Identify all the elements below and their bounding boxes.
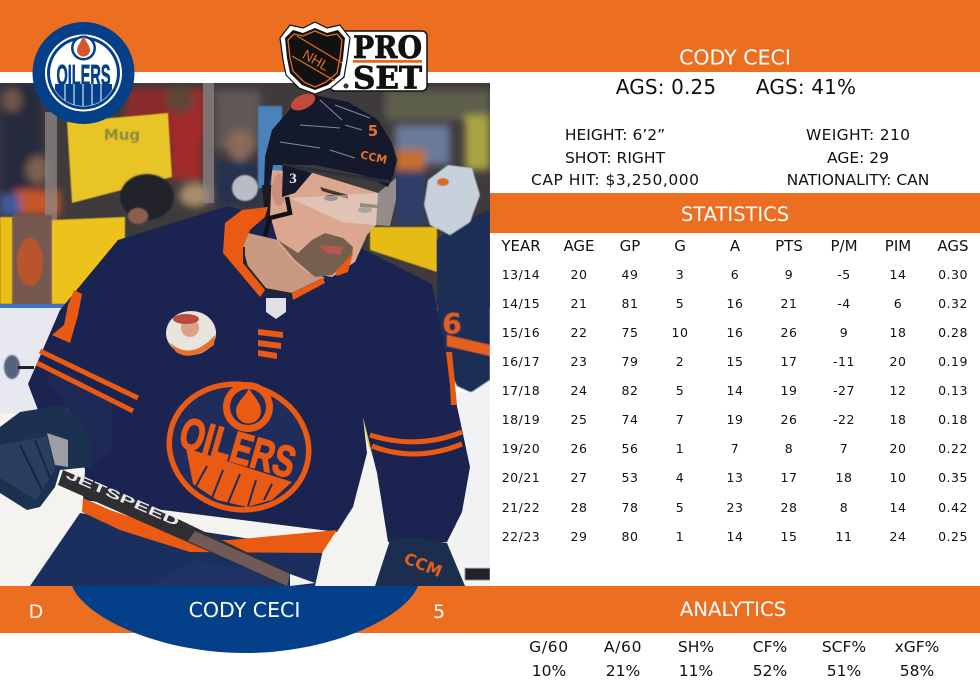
table rows: 6 (894, 296, 902, 311)
table rows (502, 267, 968, 544)
table rows: 79 (622, 354, 638, 369)
table rows: 17/18 (502, 383, 540, 398)
player name heading: CODY CECI (679, 46, 791, 70)
yellow fan signs: Mug (104, 126, 140, 144)
table rows: 8 (785, 441, 793, 456)
table rows: 78 (622, 500, 638, 515)
table rows: 9 (840, 325, 848, 340)
jersey hem stripe (82, 498, 337, 553)
right glove (375, 537, 465, 586)
analytics table: xGF% (895, 638, 939, 656)
table rows: 21 (571, 296, 587, 311)
table rows: 14 (890, 267, 906, 282)
left sleeve number (52, 290, 82, 343)
table rows: 20 (890, 354, 906, 369)
visor (290, 178, 396, 226)
table rows: 2 (676, 354, 684, 369)
table rows: 13/14 (502, 267, 540, 282)
player bio left: SHOT: RIGHT (565, 149, 666, 167)
player photo (0, 83, 490, 586)
table rows: 6 (731, 267, 739, 282)
table rows: 80 (622, 529, 638, 544)
analytics table: 11% (679, 662, 713, 680)
table rows: 27 (571, 470, 587, 485)
analytics table: 51% (827, 662, 861, 680)
table rows: 14 (727, 383, 743, 398)
right sleeve number (446, 352, 457, 405)
jersey (28, 206, 470, 542)
table header: AGS (937, 237, 969, 255)
table header: A (730, 237, 741, 255)
table rows: 22/23 (502, 529, 540, 544)
table rows: 0.19 (938, 354, 968, 369)
analytics table: G/60 (529, 638, 569, 656)
table rows: 18 (890, 412, 906, 427)
table rows: 12 (890, 383, 906, 398)
table rows: 0.30 (938, 267, 968, 282)
table header: AGE (563, 237, 595, 255)
hair behind ear (262, 185, 272, 220)
table rows: 15 (781, 529, 797, 544)
helmet brand text: CCM (359, 148, 388, 167)
player bio left: CAP HIT: $3,250,000 (531, 171, 699, 189)
table rows: 28 (781, 500, 797, 515)
player name plate: CODY CECI (189, 598, 300, 622)
helmet side plate (282, 165, 312, 197)
right glove: CCM (401, 549, 445, 581)
analytics table: SH% (678, 638, 714, 656)
table rows: 17 (781, 470, 797, 485)
table rows: -4 (837, 296, 851, 311)
table rows: 22 (571, 325, 587, 340)
table rows: 0.28 (938, 325, 968, 340)
statistics heading: STATISTICS (681, 203, 789, 226)
table rows: 0.13 (938, 383, 968, 398)
analytics heading: ANALYTICS (680, 598, 786, 621)
jersey number: 5 (433, 601, 445, 623)
player bio right: NATIONALITY: CAN (787, 171, 929, 189)
player bio right: WEIGHT: 210 (806, 126, 910, 144)
table rows: 8 (840, 500, 848, 515)
table rows: 19 (781, 383, 797, 398)
headline metrics: AGS: 0.25 (616, 75, 716, 99)
table rows: 14 (890, 500, 906, 515)
table rows: 28 (571, 500, 587, 515)
table rows: 25 (571, 412, 587, 427)
table header: G (674, 237, 686, 255)
table rows: 13 (727, 470, 743, 485)
table rows: 82 (622, 383, 638, 398)
table rows: 16/17 (502, 354, 540, 369)
face (270, 170, 378, 277)
table rows: 18 (836, 470, 852, 485)
table rows: 24 (890, 529, 906, 544)
table rows: 23 (571, 354, 587, 369)
table rows: 53 (622, 470, 638, 485)
table rows: 26 (571, 441, 587, 456)
table rows: 16 (727, 325, 743, 340)
table rows: 10 (890, 470, 906, 485)
commemorative patch (166, 311, 216, 356)
table rows: 21 (781, 296, 797, 311)
table rows: 0.35 (938, 470, 968, 485)
blue name arc (72, 586, 418, 653)
table rows: 20/21 (502, 470, 540, 485)
goalie in background (424, 165, 490, 580)
table rows: 11 (836, 529, 852, 544)
table header: YEAR (500, 237, 541, 255)
table rows: 5 (676, 296, 684, 311)
table rows: 23 (727, 500, 743, 515)
table rows: -27 (833, 383, 855, 398)
statistics table (500, 237, 969, 544)
headline metrics (616, 75, 856, 99)
top orange banner (0, 0, 980, 72)
table rows: 7 (731, 441, 739, 456)
player bio left: HEIGHT: 6’2” (565, 126, 665, 144)
table rows: 18 (890, 325, 906, 340)
eyes and brows (320, 187, 378, 213)
table rows: -22 (833, 412, 855, 427)
analytics table (529, 638, 939, 680)
mouth (318, 245, 343, 255)
table rows: 18/19 (502, 412, 540, 427)
table header: PTS (775, 237, 803, 255)
player (0, 90, 470, 586)
table rows: 29 (571, 529, 587, 544)
analytics table: 58% (900, 662, 934, 680)
table rows: 7 (676, 412, 684, 427)
blue background sign (258, 106, 282, 188)
table rows: 81 (622, 296, 638, 311)
table rows: 0.25 (938, 529, 968, 544)
left glove (0, 405, 90, 510)
table rows: 26 (781, 325, 797, 340)
table rows: -11 (833, 354, 855, 369)
stick brand text: JETSPEED (64, 468, 181, 529)
pro set wordmark: PRO (353, 30, 422, 66)
white separator strip (0, 72, 490, 83)
helmet (264, 90, 397, 236)
collar (223, 207, 353, 300)
lower sleeve shading (67, 408, 71, 412)
table rows: 0.32 (938, 296, 968, 311)
table rows: 1 (676, 529, 684, 544)
table rows: 14/15 (502, 296, 540, 311)
left sleeve stripes (37, 351, 138, 411)
logo wordmark: OILERS (56, 60, 110, 92)
headline metrics: AGS: 41% (756, 75, 856, 99)
table rows: 7 (840, 441, 848, 456)
statistics band (490, 193, 980, 233)
table rows: 0.22 (938, 441, 968, 456)
player bio left (531, 126, 699, 189)
helmet decal (290, 94, 316, 110)
table rows: 1 (676, 441, 684, 456)
jersey oilers crest (166, 381, 312, 513)
nhl pro set logo: NHL (300, 46, 332, 74)
table rows: 49 (622, 267, 638, 282)
table rows: 19 (727, 412, 743, 427)
ear (272, 174, 286, 206)
crest wordmark: OILERS (174, 408, 301, 488)
analytics table: 21% (606, 662, 640, 680)
position: D (29, 601, 43, 623)
goalie jersey number: 6 (442, 307, 462, 340)
table rows: 20 (571, 267, 587, 282)
table rows: 5 (676, 383, 684, 398)
player bio right: AGE: 29 (827, 149, 889, 167)
nhl pro set logo: SET (353, 60, 422, 96)
table header: PIM (885, 237, 911, 255)
analytics table: A/60 (604, 638, 642, 656)
logo drop (71, 36, 96, 60)
beard (278, 233, 353, 277)
pants (30, 513, 323, 586)
helmet side number: 3 (289, 171, 297, 187)
table rows: 9 (785, 267, 793, 282)
analytics table: 10% (532, 662, 566, 680)
right sleeve stripes (370, 432, 462, 454)
analytics table: 52% (753, 662, 787, 680)
table rows: 0.18 (938, 412, 968, 427)
arena crowd background (0, 83, 490, 308)
yellow fan signs (0, 113, 437, 305)
table rows: 4 (676, 470, 684, 485)
helmet back number: 5 (368, 122, 378, 140)
nhl pro set logo (280, 22, 427, 96)
blurred player helmet behind (120, 174, 174, 224)
table rows: 56 (622, 441, 638, 456)
rink boards and ice (0, 304, 490, 586)
table rows: 20 (890, 441, 906, 456)
chin strap (265, 197, 290, 236)
table rows: 19/20 (502, 441, 540, 456)
table rows: 10 (672, 325, 688, 340)
table rows: 26 (781, 412, 797, 427)
table rows: -5 (837, 267, 851, 282)
hockey stick (58, 468, 290, 586)
table rows: 15 (727, 354, 743, 369)
bottom orange bar (0, 586, 980, 633)
table rows: 16 (727, 296, 743, 311)
player bio right (787, 126, 929, 189)
table header (500, 237, 969, 255)
table rows: 15/16 (502, 325, 540, 340)
analytics table: SCF% (822, 638, 866, 656)
table rows: 75 (622, 325, 638, 340)
neckline (243, 247, 323, 295)
table rows: 74 (622, 412, 638, 427)
analytics table: CF% (753, 638, 787, 656)
neck (243, 233, 325, 294)
table rows: 17 (781, 354, 797, 369)
table rows: 0.42 (938, 500, 968, 515)
table rows: 21/22 (502, 500, 540, 515)
table rows: 14 (727, 529, 743, 544)
table header: GP (620, 237, 640, 255)
oilers team logo (32, 22, 134, 124)
NHL crest on jersey (266, 298, 286, 319)
three chest stripes (258, 329, 283, 359)
table rows: 24 (571, 383, 587, 398)
table rows: 5 (676, 500, 684, 515)
table rows: 3 (676, 267, 684, 282)
table header: P/M (830, 237, 858, 255)
